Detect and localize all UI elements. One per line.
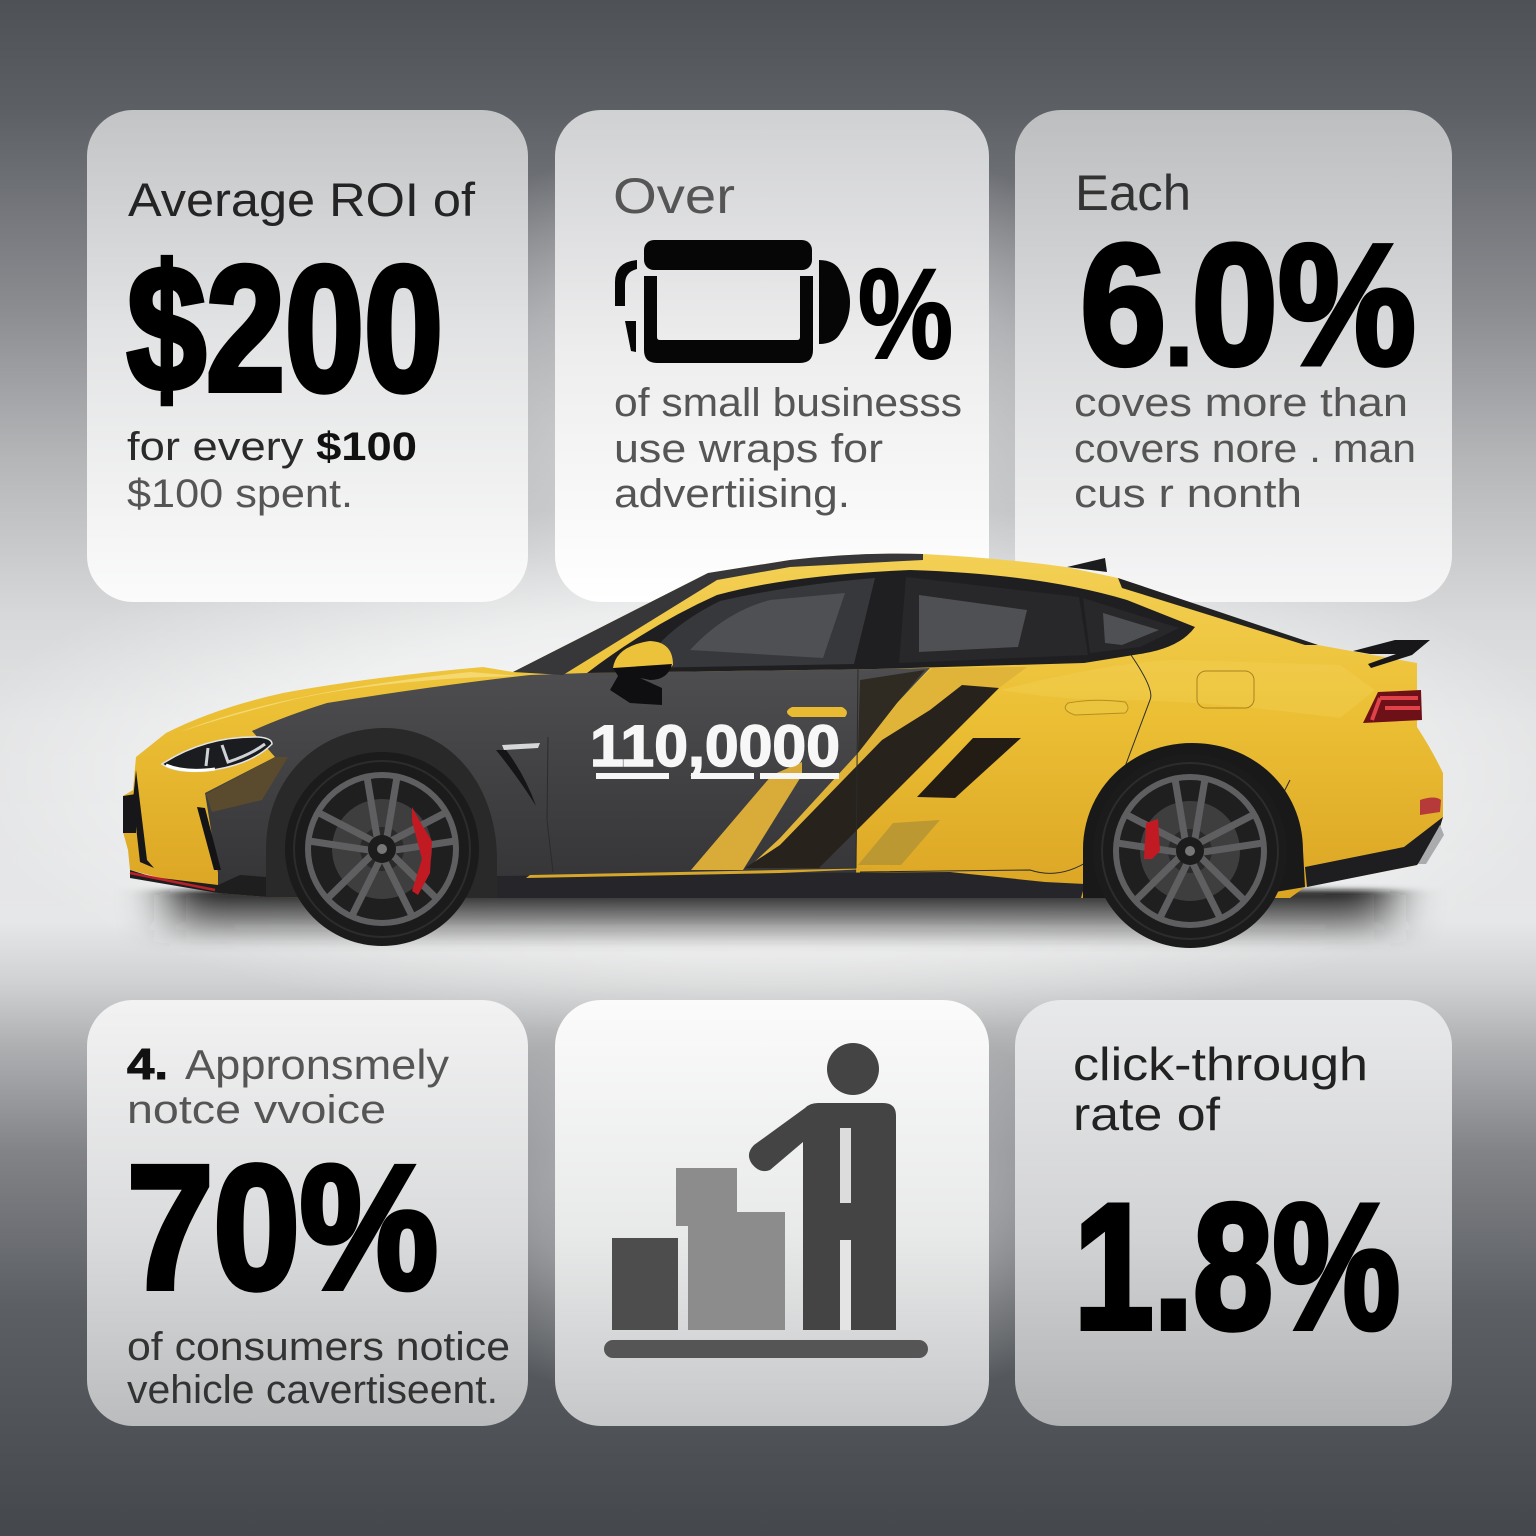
heading: Over: Over (613, 168, 735, 224)
tail light (1363, 690, 1422, 723)
text: for every $100: for every $100 (127, 425, 417, 469)
rear spoiler (1353, 640, 1430, 668)
text: of small businesses: of small businesss (614, 381, 962, 425)
panel: average ROI (87, 110, 528, 602)
panel: small businesses (555, 110, 989, 602)
icon: base line (604, 1340, 928, 1358)
car illustration (123, 554, 1444, 950)
front wheel arch (266, 728, 497, 898)
stat: 6.0%: 6.0% (1080, 209, 1416, 401)
heading: 4. Approximately: 4. (127, 1040, 168, 1089)
panel: coverage (1015, 110, 1452, 602)
bumper intake (197, 807, 221, 870)
side mirror (610, 641, 673, 705)
icon: bar steps (612, 1168, 785, 1330)
yellow highlight on hood (180, 672, 520, 732)
stat: percent sign: % (858, 243, 953, 386)
panel: consumers notice: notce vvoice (127, 1088, 386, 1132)
window frame (587, 570, 1195, 673)
panel: consumers notice (87, 1000, 528, 1426)
black diagonal stripes (745, 685, 999, 868)
stat: 70%: 70% (127, 1130, 438, 1326)
door handles (787, 707, 847, 717)
heading: click-through rate of: click-through (1073, 1038, 1368, 1090)
headlight (162, 737, 272, 771)
front wheel (285, 752, 479, 946)
gold door stripe (691, 762, 802, 870)
chrome fender vent (502, 743, 540, 750)
text: coverage description: coves more than (1074, 381, 1408, 425)
rocker sill (496, 872, 1085, 898)
door seams (547, 655, 1290, 873)
icon: vehicle wrap glyph (615, 240, 850, 363)
text: of small businesses: use wraps for (614, 427, 883, 471)
text: coverage description: covers nore . man (1074, 427, 1416, 471)
brake caliper (412, 807, 432, 895)
rear wheel arch (1083, 743, 1305, 898)
stat: 1.8%: 1.8% (1074, 1167, 1400, 1366)
panel: click-through rate (1015, 1000, 1452, 1426)
car body (123, 554, 1443, 898)
brown door shade (858, 670, 925, 753)
license plate and grille (123, 770, 154, 868)
dark front wrap (205, 668, 930, 898)
door number: 110,0000: 110,0000 (590, 714, 840, 779)
fuel door (1197, 671, 1254, 708)
tan panel stripe (858, 820, 940, 865)
ground shadow (170, 890, 1390, 950)
panel: consumers notice: Appronsmely (185, 1041, 449, 1088)
rear lower valance (1305, 817, 1443, 887)
front bumper lip (130, 870, 268, 897)
bronze fender reflection (206, 757, 288, 812)
stat: $200: $200 (127, 229, 443, 428)
heading: Average ROI of: Average ROI of (128, 173, 476, 226)
text: of consumers notice (127, 1325, 510, 1412)
yellow diagonal stripe (748, 667, 1027, 868)
dark roof (513, 554, 923, 675)
text: of small businesses: advertiising. (614, 472, 850, 516)
text: coverage description: cus r nonth (1074, 472, 1302, 516)
panel: person and bars icon (555, 1000, 989, 1426)
text: of small businesses (614, 381, 962, 516)
brake caliper (1144, 819, 1160, 859)
heading: Each: Each (1075, 165, 1191, 221)
rear wheel (1093, 754, 1287, 948)
yellow highlight on rear quarter (1000, 660, 1375, 718)
text: coverage description (1074, 381, 1416, 516)
heading: click-through rate of (1073, 1038, 1368, 1140)
text: of consumers notice: vehicle cavertiseent. (127, 1368, 498, 1412)
icon: person (749, 1043, 896, 1330)
text: of consumers notice: of consumers notice (127, 1325, 510, 1369)
heading: click-through rate of: rate of (1073, 1088, 1220, 1140)
window glass (640, 578, 875, 668)
text: $100 spent: $100 spent. (127, 472, 353, 516)
